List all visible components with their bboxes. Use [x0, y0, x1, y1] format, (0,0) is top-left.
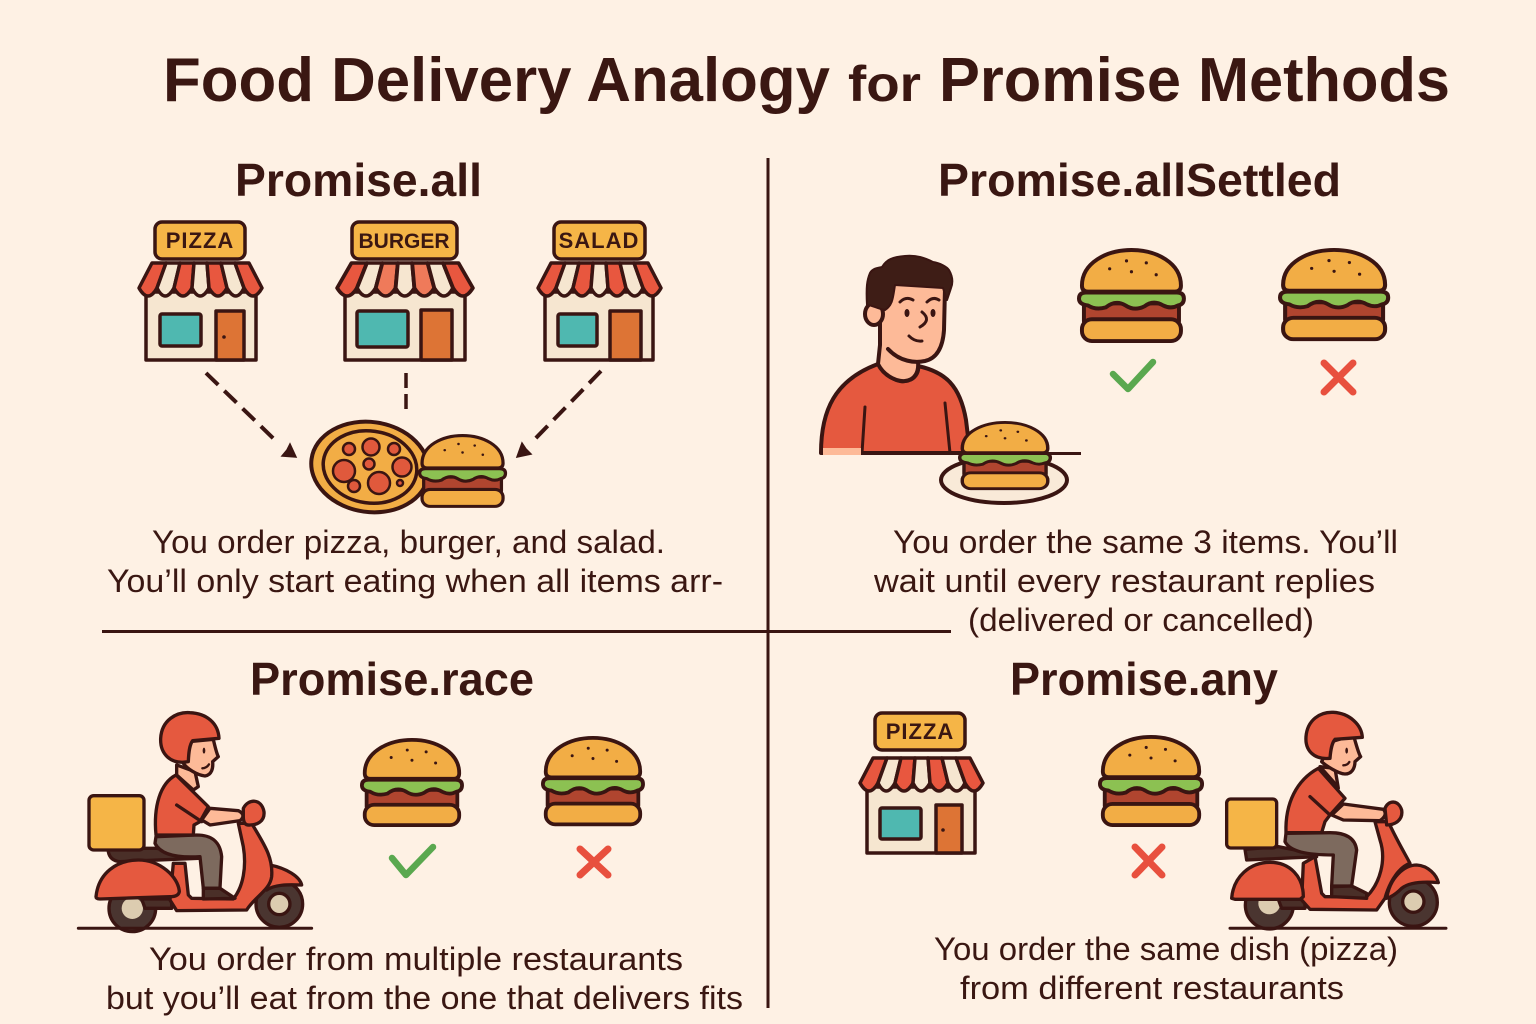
icon: cross mark: [580, 849, 608, 875]
text: Promise.all description: [107, 524, 723, 599]
text: Promise.any description: [934, 931, 1398, 1006]
text: Promise.race description: [106, 941, 743, 1016]
icon: cancelled burger: [1280, 250, 1388, 339]
arrow: salad shop to food: [517, 371, 601, 457]
icon: delivery scooter: [78, 713, 312, 932]
text: Promise.allSettled description: You order the same 3 items. You’ll: [893, 524, 1398, 560]
text: Promise.any description: from different restaurants: [960, 970, 1344, 1006]
icon: pizza shop: PIZZA: [166, 228, 234, 253]
icon: person at table: [821, 256, 970, 455]
icon: pizza shop: PIZZA: [886, 719, 954, 744]
text: Promise.all description: You’ll only start eating when all items arr-: [107, 563, 723, 599]
icon: cross mark: [1324, 363, 1353, 392]
text: Promise.any description: You order the same dish (pizza): [934, 931, 1398, 967]
icon: check mark: [392, 847, 433, 875]
title: [163, 46, 1450, 115]
text: Promise.allSettled description: [873, 524, 1398, 638]
icon: cross mark: [1135, 847, 1162, 875]
icon: winning burger: [362, 740, 462, 825]
panel: Promise.all: [107, 154, 723, 599]
arrow: pizza shop to food: [206, 373, 296, 457]
arrow: burger shop to food: [404, 373, 408, 410]
icon: salad shop: SALAD: [559, 228, 639, 253]
text: Promise.race description: but you’ll eat from the one that delivers fits: [106, 980, 743, 1016]
icon: pizza shop: [139, 222, 262, 360]
horizontal divider: [102, 630, 951, 633]
text: Promise.allSettled description: wait until every restaurant replies: [873, 563, 1375, 599]
icon: burger: [1100, 737, 1202, 825]
icon: pizza: [305, 414, 435, 520]
icon: losing burger: [543, 738, 643, 824]
text: Promise.allSettled description: (delivered or cancelled): [968, 602, 1314, 638]
table edge: [862, 452, 1081, 455]
icon: plate: [941, 457, 1067, 503]
icon: burger shop: BURGER: [358, 230, 450, 253]
heading: Promise.any: Promise.any: [1010, 653, 1278, 705]
panel: Promise.race: [78, 653, 743, 1016]
title: Promise Methods: [939, 46, 1450, 115]
vertical divider: [766, 158, 770, 1008]
icon: burger with pizza: [420, 436, 505, 506]
panel: Promise.any: [860, 653, 1446, 1006]
icon: delivery scooter: [1227, 712, 1446, 929]
title: for: [848, 56, 921, 112]
icon: salad shop: [538, 222, 661, 360]
panel: Promise.allSettled: [821, 154, 1398, 638]
text: Promise.all description: You order pizza, burger, and salad.: [152, 524, 665, 560]
heading: Promise.race: Promise.race: [250, 653, 534, 705]
icon: check mark: [1113, 362, 1153, 389]
icon: delivered burger: [1079, 250, 1184, 341]
icon: burger on plate: [960, 422, 1050, 489]
icon: burger shop: [337, 222, 473, 360]
text: Promise.race description: You order from multiple restaurants: [149, 941, 683, 977]
heading: Promise.allSettled: Promise.allSettled: [938, 154, 1341, 206]
icon: pizza shop: [860, 713, 983, 853]
heading: Promise.all: Promise.all: [235, 154, 482, 206]
title: Food Delivery Analogy: [163, 46, 831, 115]
